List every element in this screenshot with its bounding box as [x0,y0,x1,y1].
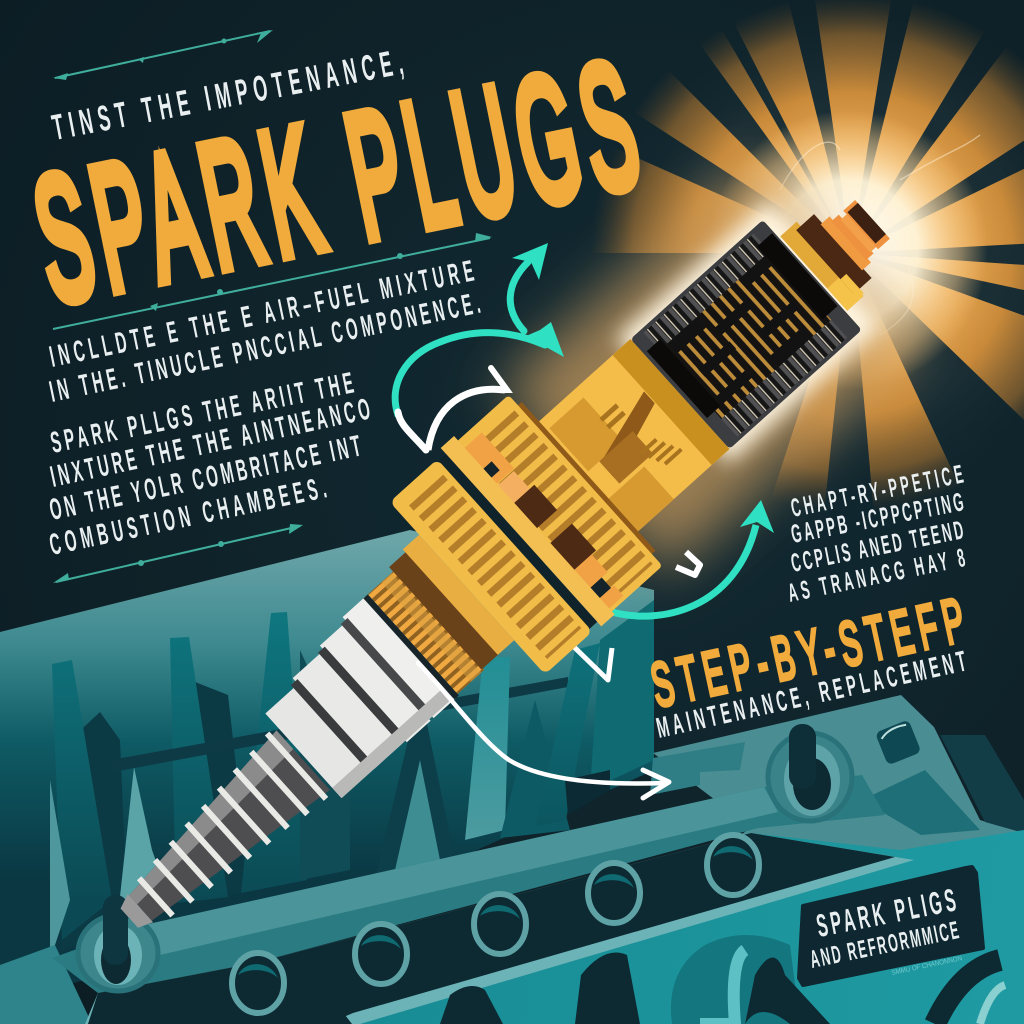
bright flange band [441,436,615,626]
upper ribbed flange [455,395,662,614]
body text block: INXTURE THE THE AINTNEANCO [48,393,373,494]
warm tan glow around plug [500,161,920,574]
long white arrow to engine [418,663,669,798]
small rounded plug cap [875,719,921,765]
bottom casting arches [310,935,1005,1024]
orange and brown flange blocks [458,428,631,614]
left boss and stud [78,895,158,991]
small white arrow under collar [572,645,612,680]
white chevron [676,552,700,575]
divider arrow middle [53,233,492,329]
right boss and stud [768,724,852,821]
left flange [0,945,92,1024]
engine right upper block [500,695,1024,1024]
divider arrow top [53,30,273,80]
long window with rim [85,833,914,1024]
label plate: SPARK PLIGS [814,883,959,944]
lower ribbed ring [390,459,592,674]
intro text block: INCLLDTE E THE E AIR–FUEL MIXTURE [47,255,477,374]
white insulator [252,594,459,800]
spark plug [35,131,954,992]
dark flange gap [437,454,597,630]
threaded tip [99,727,333,950]
teal branching arrow [395,243,564,450]
body text block: ON THE YOLR COMBRITACE INT [47,430,364,527]
pale glow around finned section [616,201,881,463]
label plate: SMMU OF CHANONNON [891,955,963,977]
label plate [799,867,983,985]
engine back wall [0,530,654,1000]
step-by-step heading: STEP-BY-STEFP [646,587,971,721]
main title: SPARK PLUGS [20,26,652,339]
subheading: MAINTENANCE, REPLACEMENT [653,644,969,744]
body text block [47,367,373,562]
gold body [516,320,747,555]
label plate: AND REFRORMMICE [808,917,961,974]
hole crescents [238,846,753,978]
terminal [780,183,907,311]
engine lower casting [85,830,1024,1024]
right text block: GAPPB -ICPPCPTING [789,488,966,549]
right text block: CCPLIS ANED TEEND [789,516,966,578]
title kicker: TINST THE IMPOTENANCE, [49,42,406,149]
white arrow from collar [428,368,507,450]
right text block [785,460,968,608]
body text block: SPARK PLLGS THE ARIIT THE [48,367,356,460]
dark finned section [630,220,862,449]
intro text block: IN THE. TINUCLE PNCCIAL COMPONENCE. [47,287,483,409]
sunburst rays [531,0,1024,572]
engine block [0,530,1024,1024]
body text block: COMBUSTION CHAMBEES. [47,472,330,562]
right text block: AS TRANACG HAY 8 [785,544,968,608]
engine valve spikes [50,600,654,960]
window holes [232,835,759,1013]
valve rail [52,742,885,993]
right text block: CHAPT-RY-PPETICE [788,460,966,523]
lower ribbed collar [361,535,515,694]
lower right teal arrow [612,500,774,616]
divider arrow lower [53,524,303,583]
